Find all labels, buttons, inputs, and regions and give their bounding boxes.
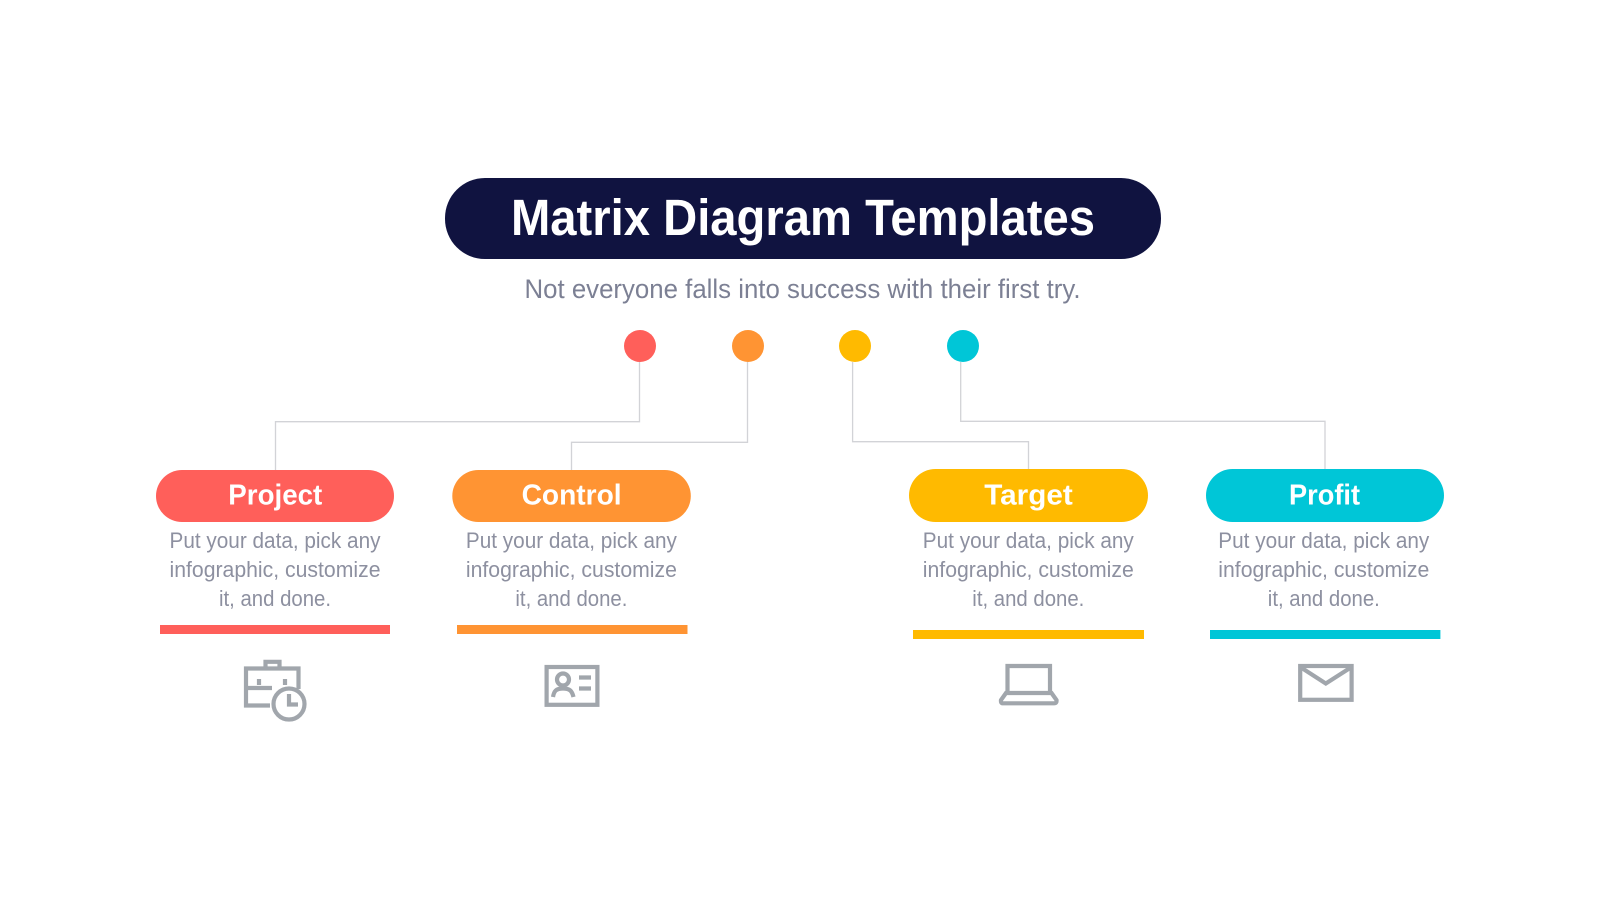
- dot: yellow: [839, 330, 871, 362]
- text block: project: Put your data, pick any: [170, 528, 381, 553]
- text block: target: it, and done.: [972, 586, 1084, 611]
- icon: laptop: [1001, 666, 1057, 703]
- text block: profit: [1218, 528, 1430, 611]
- label pill: control: [452, 470, 691, 522]
- text block: control: it, and done.: [515, 586, 627, 611]
- text block: profit: infographic, customize: [1218, 557, 1429, 582]
- accent bar: target: [913, 630, 1144, 639]
- text block: control: infographic, customize: [466, 557, 677, 582]
- text block: target: Put your data, pick any: [923, 528, 1134, 553]
- text block: profit: it, and done.: [1268, 586, 1380, 611]
- text block: control: Put your data, pick any: [466, 528, 678, 553]
- label pill: target: [909, 469, 1148, 522]
- connector: target: [853, 362, 1028, 469]
- dot: red: [624, 330, 656, 362]
- label pill: control: Control: [522, 480, 622, 512]
- connector: profit: [961, 362, 1325, 469]
- accent bar: control: [457, 625, 688, 634]
- accent bar: project: [160, 625, 390, 634]
- label pill: project: [156, 470, 394, 522]
- label pill: target: Target: [984, 480, 1073, 512]
- panel: profit: [1206, 469, 1444, 700]
- text block: profit: Put your data, pick any: [1218, 528, 1430, 553]
- text block: project: it, and done.: [219, 586, 331, 611]
- connector: project: [276, 362, 640, 470]
- title: [445, 178, 1161, 259]
- title: Matrix Diagram Templates: [511, 189, 1095, 246]
- text block: project: [170, 528, 381, 611]
- connector: control: [572, 362, 748, 470]
- icon: envelope: [1300, 666, 1352, 700]
- dot: orange: [732, 330, 764, 362]
- label pill: project: Project: [228, 480, 323, 512]
- label pill: profit: Profit: [1289, 480, 1360, 512]
- text block: project: infographic, customize: [170, 557, 380, 582]
- subtitle: Not everyone falls into success with their first try.: [524, 274, 1080, 304]
- panel: control: [452, 470, 691, 705]
- label pill: profit: [1206, 469, 1444, 522]
- text block: target: [923, 528, 1134, 611]
- icon: id card: [547, 667, 597, 705]
- accent bar: profit: [1210, 630, 1440, 639]
- dot: teal: [947, 330, 979, 362]
- panel: project: [156, 470, 394, 720]
- icon: briefcase with clock: [246, 662, 304, 720]
- panel: target: [909, 469, 1148, 703]
- text block: control: [466, 528, 678, 611]
- text block: target: infographic, customize: [923, 557, 1134, 582]
